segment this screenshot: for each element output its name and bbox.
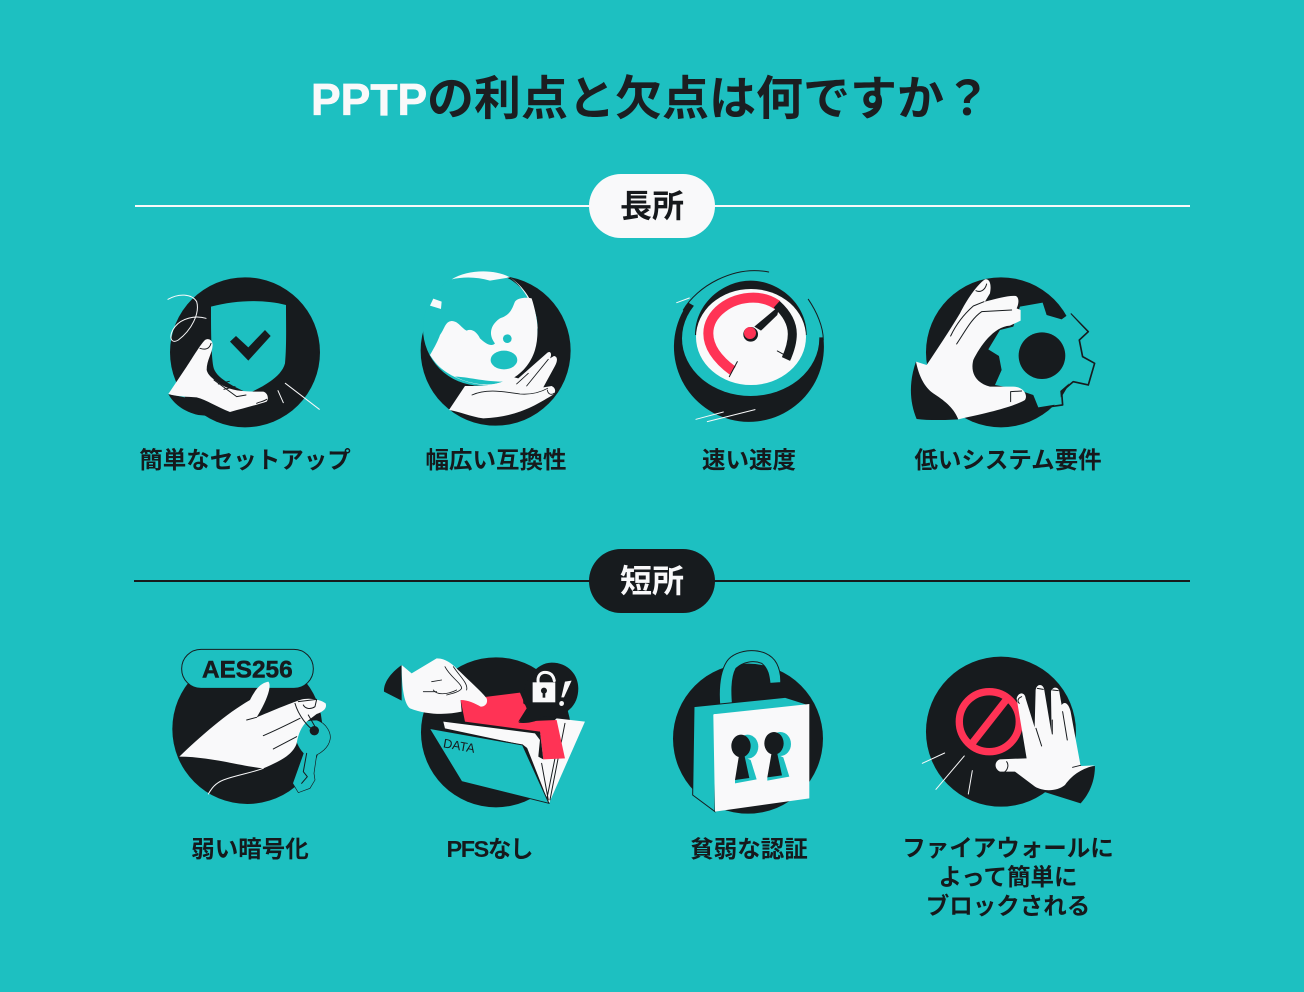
icon: data folder xyxy=(384,657,585,807)
label: easily blocked by firewall: よって簡単に xyxy=(938,864,1078,890)
icon: hand with gear xyxy=(911,277,1095,427)
icon: blocking hand xyxy=(922,657,1095,807)
title: PPTP xyxy=(311,76,427,125)
label: easily blocked by firewall: ファイアウォールに xyxy=(902,835,1114,861)
label: weak authentication: 貧弱な認証 xyxy=(690,836,808,862)
heading: disadvantages xyxy=(589,549,715,613)
icon: AES256 key in hand xyxy=(172,649,330,804)
label: easily blocked by firewall: ブロックされる xyxy=(926,892,1090,919)
label: no PFS: PFSなし xyxy=(446,836,534,862)
heading: advantages xyxy=(589,174,715,238)
label: easy setup: 簡単なセットアップ xyxy=(139,447,351,473)
heading: disadvantages: 短所 xyxy=(620,563,684,599)
label: fast speed: 速い速度 xyxy=(702,447,796,473)
label: wide compatibility: 幅広い互換性 xyxy=(426,447,566,473)
label: low system requirements: 低いシステム要件 xyxy=(914,447,1102,473)
label: weak encryption: 弱い暗号化 xyxy=(191,836,309,862)
icon: AES256 key in hand: AES256 xyxy=(202,656,293,683)
icon: padlock with two keyholes xyxy=(673,651,823,814)
label: easily blocked by firewall xyxy=(902,835,1114,919)
icon: globe on hand xyxy=(421,271,571,426)
icon: data folder: DATA xyxy=(442,736,476,756)
icon: speedometer xyxy=(674,271,824,422)
title: の利点と欠点は何ですか？ xyxy=(427,72,991,125)
heading: advantages: 長所 xyxy=(620,188,684,224)
icon: shield on hand xyxy=(168,277,320,427)
